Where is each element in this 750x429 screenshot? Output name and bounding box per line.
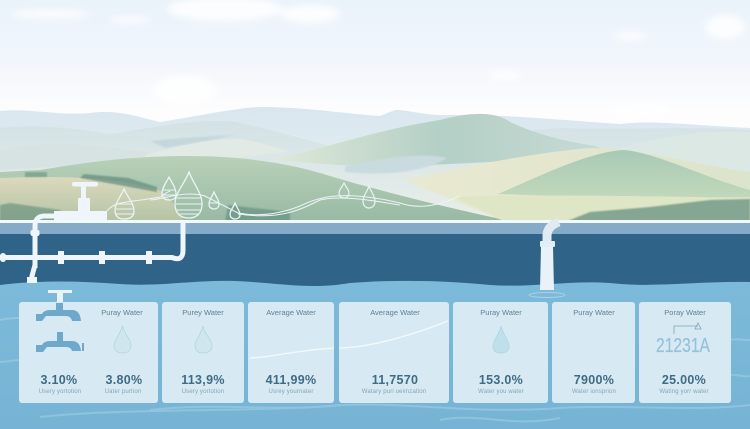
icon: bottom tap — [36, 332, 84, 352]
heading: Average Water — [370, 308, 420, 317]
caption: Wating yorr water — [659, 389, 709, 395]
icon: top tap — [36, 290, 81, 321]
stat left: 3.10% — [41, 373, 77, 387]
stat: 11,7570 — [372, 373, 418, 387]
icon: drop — [195, 326, 212, 353]
icon: drop — [493, 326, 509, 353]
panel: card 7 — [639, 302, 731, 403]
heading: Poray Water — [664, 308, 706, 317]
caption left: Usery yortotion — [39, 389, 81, 395]
stat: 7900% — [574, 373, 614, 387]
heading: Average Water — [266, 308, 316, 317]
stat: 113,9% — [181, 373, 225, 387]
water background — [0, 281, 750, 429]
caption: Water ionsprion — [572, 389, 616, 395]
tap and pipe network — [0, 182, 183, 283]
heading: Purey Water — [182, 308, 224, 317]
outlet pipe pouring water — [529, 222, 565, 298]
sky with clouds — [0, 0, 750, 222]
stat: 25.00% — [662, 373, 706, 387]
rolling hills landscape — [0, 107, 750, 222]
caption right: Uater purtion — [105, 389, 141, 395]
trend line — [250, 348, 334, 358]
panel: card 6 — [552, 302, 635, 403]
water drops and flow lines — [106, 172, 460, 219]
big code label: 21231A — [656, 335, 711, 357]
trend line — [339, 321, 448, 348]
icon: drop — [114, 326, 131, 353]
stat right: 3.80% — [106, 373, 142, 387]
caption: Usery yortotion — [182, 389, 224, 395]
stat: 153.0% — [479, 373, 523, 387]
caption: Water you water — [478, 389, 524, 395]
ground band — [0, 220, 750, 294]
panel: card 4 — [339, 302, 449, 403]
panel: card 3 — [248, 302, 334, 403]
panel: card 2 — [162, 302, 244, 403]
stat: 411,99% — [266, 373, 316, 387]
heading: Puray Water — [573, 308, 615, 317]
bracket mark — [674, 323, 701, 334]
panel: card 5 — [453, 302, 548, 403]
caption: Watary puri ueimzation — [362, 389, 426, 395]
panel: card 1 — [19, 290, 158, 403]
heading: Puray Water — [480, 308, 522, 317]
caption: Usrey yournater — [269, 389, 313, 395]
heading: Puray Water — [101, 308, 143, 317]
